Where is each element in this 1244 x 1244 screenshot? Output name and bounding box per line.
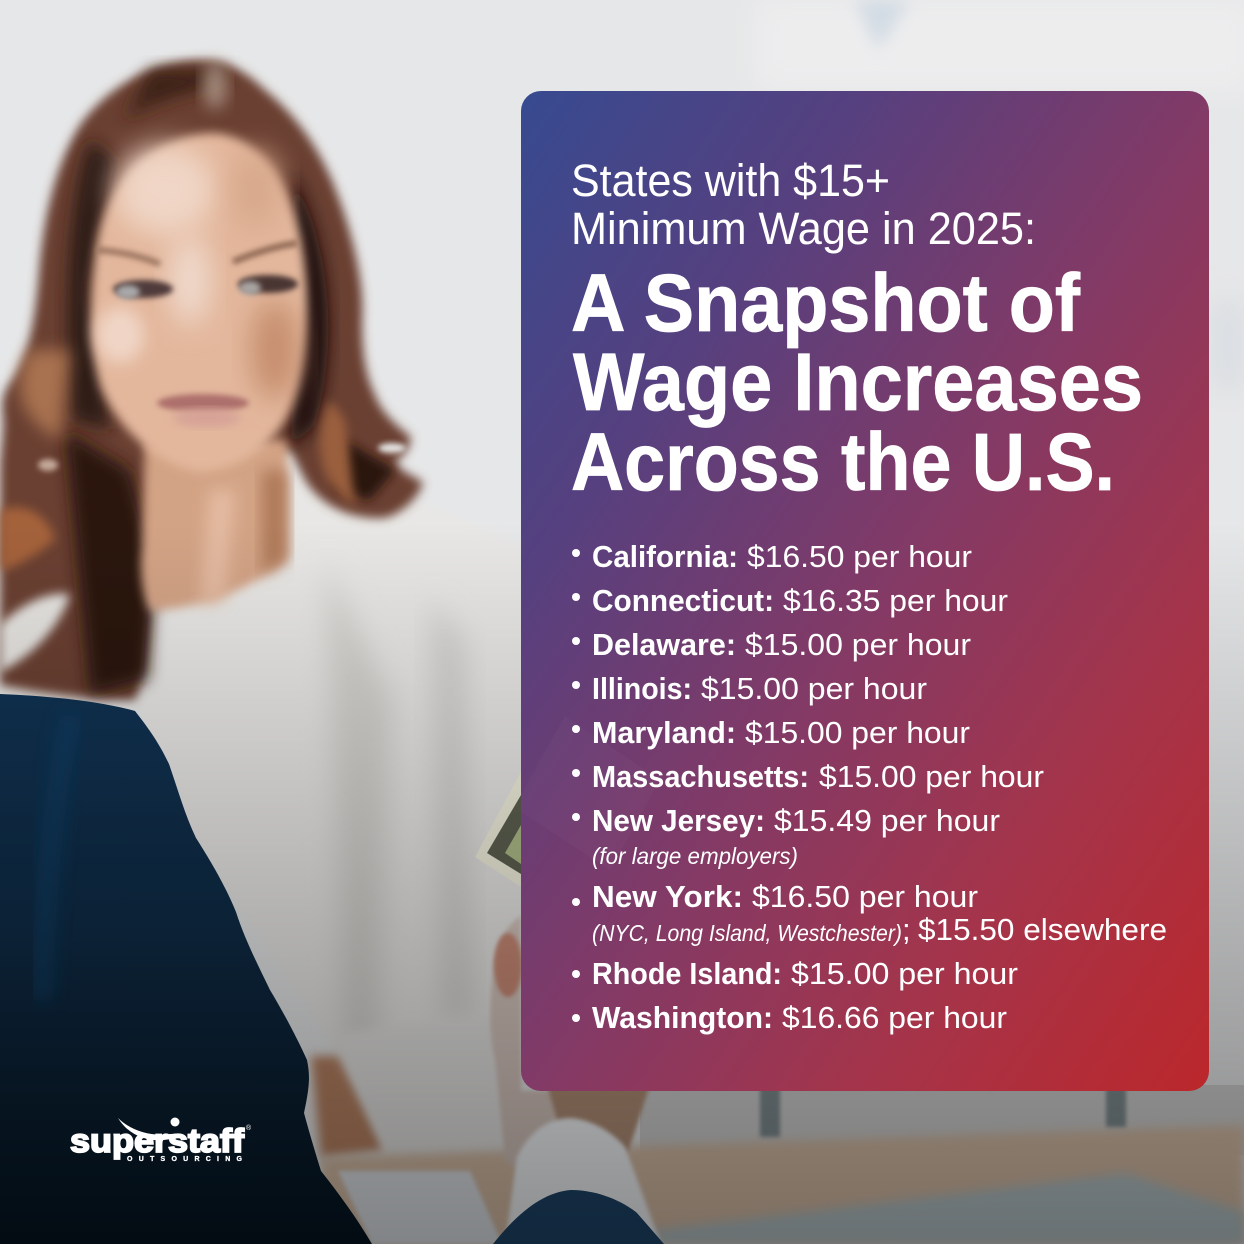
eyes	[113, 280, 173, 298]
icon: swoosh and dot	[118, 1118, 182, 1140]
blurred woman	[0, 60, 521, 1168]
title: Wage Increases	[573, 337, 1143, 428]
item: Delaware: Delaware:	[592, 627, 736, 662]
item: Rhode Island: $15.00 per hour	[791, 956, 1018, 991]
item: Massachusetts: $15.00 per hour	[819, 759, 1044, 794]
blurred desk	[321, 1085, 1244, 1244]
list: state wages	[572, 539, 1167, 1035]
item: Connecticut: $16.35 per hour	[783, 583, 1008, 618]
item: Massachusetts: Massachusetts:	[592, 759, 809, 794]
item: California	[572, 539, 972, 574]
item: Maryland: $15.00 per hour	[745, 715, 970, 750]
neck	[141, 440, 287, 611]
item: Illinois: Illinois:	[592, 671, 692, 706]
item: Massachusetts	[572, 759, 1044, 794]
face	[91, 133, 307, 472]
banknotes	[475, 772, 521, 887]
hair shading	[68, 140, 115, 430]
legs	[760, 1085, 780, 1137]
title: Across the U.S.	[571, 417, 1115, 508]
title	[571, 258, 1143, 508]
item: Connecticut: Connecticut:	[592, 583, 774, 618]
logo: Superstaff Outsourcing: ®	[246, 1124, 252, 1132]
item: New York: (NYC, Long Island, Westchester)	[592, 920, 902, 946]
item: Maryland	[572, 715, 970, 750]
item: Washington: Washington:	[592, 1000, 773, 1035]
item: New Jersey: New Jersey:	[592, 803, 765, 838]
panel: gradient card	[521, 91, 1209, 1091]
item: Maryland: Maryland:	[592, 715, 736, 750]
item: New York: $15.50 elsewhere	[918, 912, 1167, 947]
paper	[338, 1171, 502, 1244]
item: Washington: $16.66 per hour	[782, 1000, 1007, 1035]
item: New Jersey: (for large employers)	[592, 843, 798, 869]
sleeve	[338, 1018, 507, 1165]
item: New York: ;	[902, 912, 911, 947]
hand and cuff	[490, 916, 664, 1244]
item: Delaware: $15.00 per hour	[745, 627, 971, 662]
logo: Superstaff Outsourcing: OUTSOURCING	[127, 1156, 243, 1163]
navy jacket foreground	[0, 694, 372, 1244]
face light	[115, 145, 215, 235]
logo: Superstaff Outsourcing: superstaff	[70, 1122, 245, 1159]
item: Rhode Island: Rhode Island:	[592, 956, 782, 991]
item: California: California:	[592, 539, 738, 574]
forearm	[311, 1056, 385, 1158]
subtitle	[571, 155, 1036, 254]
item: Illinois: $15.00 per hour	[701, 671, 927, 706]
faint banknote in card	[521, 716, 660, 870]
hair	[0, 60, 423, 700]
title: A Snapshot of	[571, 258, 1081, 349]
item: Delaware	[572, 627, 971, 662]
mouth	[157, 394, 249, 412]
item: Washington	[572, 1000, 1007, 1035]
item: Illinois	[572, 671, 927, 706]
notch in hair	[378, 443, 406, 453]
blazer	[0, 470, 521, 1168]
eyebrows	[97, 250, 160, 264]
item: Connecticut	[572, 583, 1008, 618]
laptop	[640, 1173, 1244, 1244]
item: New York	[572, 879, 1167, 947]
item: California: $16.50 per hour	[747, 539, 972, 574]
item: Rhode Island	[572, 956, 1018, 991]
subtitle: Minimum Wage in 2025:	[571, 203, 1036, 254]
item: New Jersey: $15.49 per hour	[774, 803, 1000, 838]
item: New Jersey	[572, 803, 1000, 869]
white gap in hair	[0, 594, 70, 672]
item: New York: $16.50 per hour	[752, 879, 978, 914]
subtitle: States with $15+	[571, 155, 890, 206]
item: New York: New York:	[592, 879, 743, 914]
